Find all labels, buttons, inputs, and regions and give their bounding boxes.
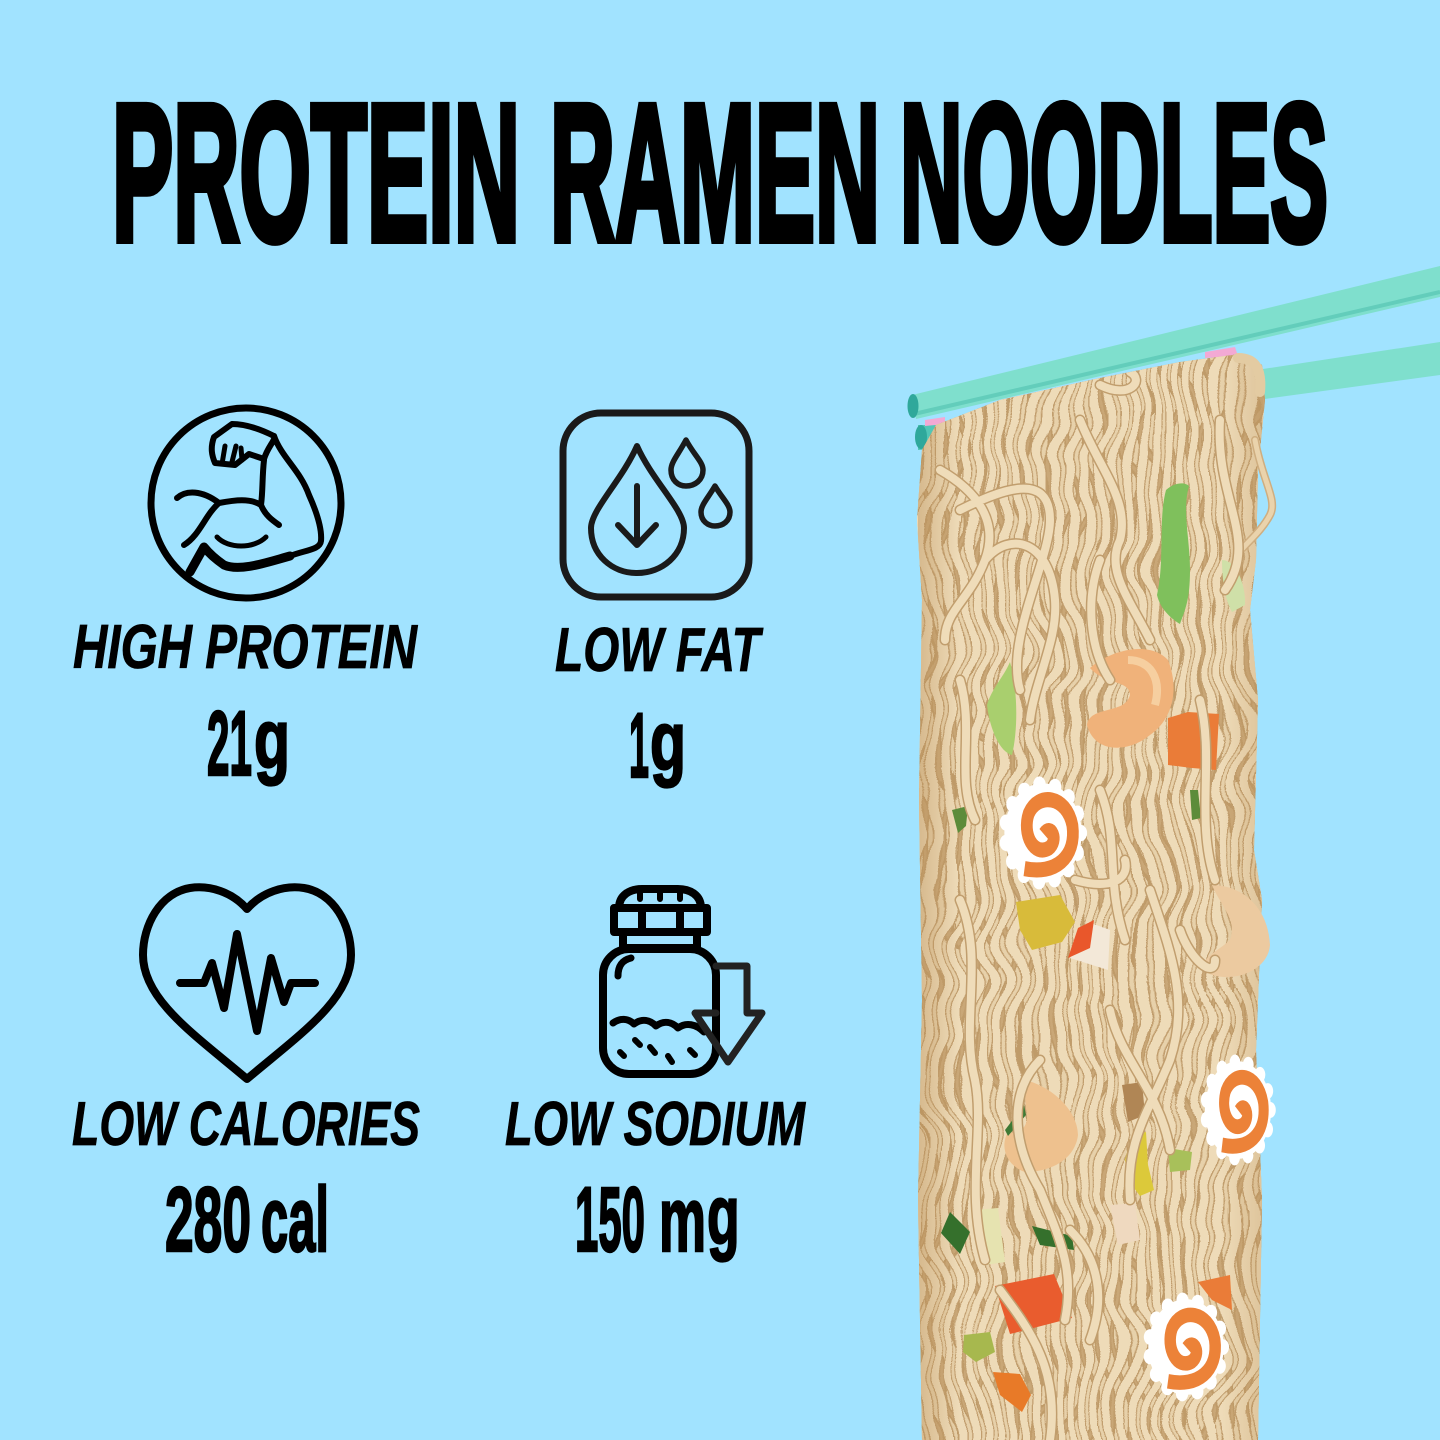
topping: crab stick xyxy=(1068,920,1110,970)
icon: low fat droplets xyxy=(563,413,749,597)
topping: pale leaf lower xyxy=(975,1208,1005,1265)
icon: flexed bicep xyxy=(151,408,341,598)
topping: crab stick lower xyxy=(995,1274,1072,1334)
upper chopstick xyxy=(908,266,1440,419)
topping: pale green leaf xyxy=(987,662,1016,755)
topping: mixed bits middle xyxy=(1110,1082,1192,1245)
value: 1g: 1 xyxy=(629,695,649,797)
topping: narutomaki top xyxy=(1004,783,1082,883)
value: 280 cal: cal xyxy=(261,1169,329,1271)
title: PROTEIN xyxy=(112,64,520,282)
topping: yellow pepper lower xyxy=(1125,1132,1154,1196)
value: 21g: 21 xyxy=(207,693,252,795)
label: low fat: LOW FAT xyxy=(555,616,764,685)
icon: salt jar with down arrow xyxy=(603,889,762,1074)
topping: yellow pepper xyxy=(1016,895,1075,950)
topping: carrot right xyxy=(1198,1275,1232,1310)
noodle bundle xyxy=(905,330,1283,1440)
value: 150 mg: m xyxy=(659,1169,706,1271)
value: 150 mg: 150 xyxy=(575,1169,645,1271)
value: 280 cal: 280 xyxy=(165,1169,251,1271)
title: RAMEN xyxy=(550,64,880,282)
lower chopstick xyxy=(915,342,1440,450)
topping: carrot top xyxy=(1168,712,1219,770)
topping: green cabbage xyxy=(1157,483,1245,624)
topping: green pepper lower xyxy=(963,1332,995,1362)
loose noodle strands xyxy=(940,372,1238,1440)
topping: carrot lower xyxy=(993,1372,1031,1412)
value: 21g: g xyxy=(254,693,290,787)
topping: shrimp top xyxy=(1087,649,1174,748)
value: 150 mg: g xyxy=(707,1168,740,1262)
icon: heart with pulse xyxy=(143,887,351,1079)
value: 1g: g xyxy=(650,695,686,789)
topping: shrimp lower xyxy=(1004,1080,1078,1172)
label: low sodium: LOW SODIUM xyxy=(505,1090,806,1159)
topping: small green bits top xyxy=(952,790,1201,833)
topping: green onion pieces xyxy=(941,1212,1074,1254)
topping: narutomaki bottom xyxy=(1148,1299,1224,1395)
topping: shrimp right xyxy=(1203,885,1270,977)
label: high protein: HIGH PROTEIN xyxy=(73,613,418,682)
label: low calories: LOW CALORIES xyxy=(72,1090,420,1159)
topping: narutomaki right xyxy=(1205,1061,1271,1159)
